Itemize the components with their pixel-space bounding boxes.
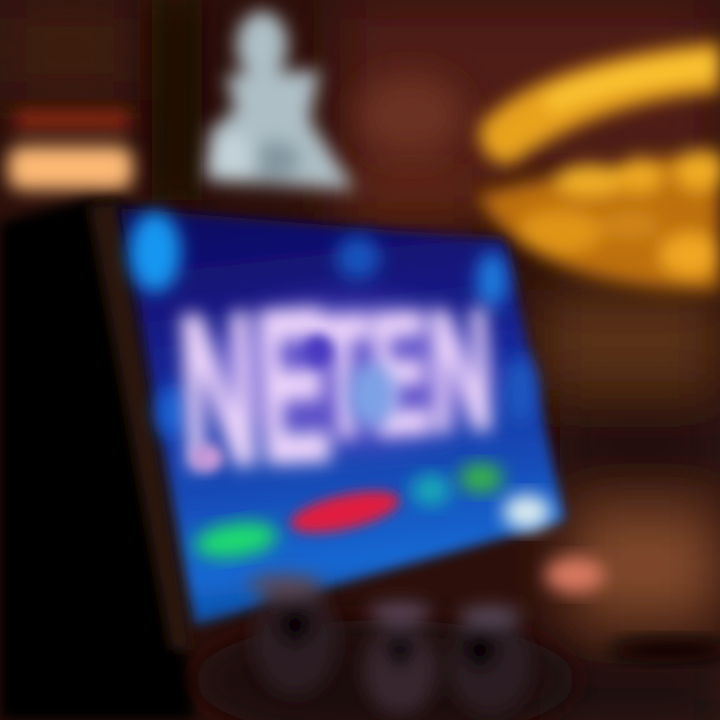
teal button (411, 474, 451, 506)
dark cabinet (0, 200, 195, 720)
floor shadow (610, 638, 720, 662)
cabinet edge (88, 200, 192, 650)
green button (192, 517, 280, 563)
logo foot (192, 444, 224, 472)
logo text: TEN (313, 274, 498, 473)
blurred logo halo (205, 305, 485, 445)
screen lights (129, 212, 536, 438)
dark pillar (152, 0, 202, 200)
foreground shadow (195, 620, 575, 720)
red button (287, 483, 403, 541)
pink light (545, 557, 605, 593)
logo centre glow (348, 363, 396, 427)
logo text: NE (173, 264, 336, 512)
screen (120, 208, 565, 625)
left warm light (8, 112, 133, 190)
lime button (459, 463, 503, 493)
chair shapes (247, 574, 532, 715)
logo dark gap (305, 335, 331, 365)
white star figure (205, 11, 355, 190)
ceiling dome (355, 73, 465, 157)
white button (503, 494, 551, 530)
chandelier (478, 42, 720, 290)
